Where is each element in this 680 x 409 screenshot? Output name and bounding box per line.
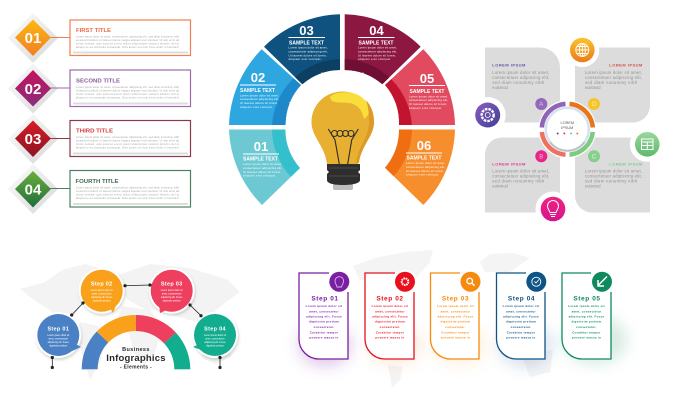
segment 05: aliquam erat volutpat. — [409, 106, 442, 110]
card: step 03: consectetur. — [445, 325, 466, 329]
bubble: step 01: amet, consectetuer — [49, 338, 68, 340]
card: step 02: consectetur. — [380, 325, 400, 329]
card: step 05: consectetur. — [576, 325, 597, 329]
bubble: step 01 — [35, 312, 82, 360]
segment 05 — [385, 49, 455, 125]
card: top right — [575, 48, 650, 122]
segment 02: Ut laoreet dolore sit lorem, — [240, 101, 278, 105]
badge B: B — [539, 154, 543, 160]
segment 06: 06 — [417, 138, 431, 153]
card: bottom left: sed diam nonummy nibh — [492, 178, 545, 184]
segment 03: Lorem ipsum dolor sit amet, — [288, 46, 328, 50]
card: step 05: Lorem ipsum dolor sit — [568, 304, 605, 308]
badge C — [588, 150, 600, 162]
card: step 01: Lorem ipsum dolor sit — [306, 304, 342, 308]
segment 06 — [385, 130, 455, 205]
segment 05: Ut laoreet dolore sit lorem, — [409, 102, 447, 106]
item 03: aliquip ex ea commodo consequat. Duis autem vel eum iriure dolor in hendrerit — [76, 146, 179, 150]
segment 04: aliquam erat volutpat. — [358, 57, 391, 61]
item 02: SECOND TITLE — [76, 78, 120, 84]
item 04: 04 — [25, 182, 42, 198]
item 01: minim veniam, quis nostrud exerci tation ullamcorper suscipit lobortis nisl ut — [76, 42, 179, 46]
segment 05: consectetuer adipiscing elit, — [409, 98, 448, 102]
item 01: euismod tincidunt ut laoreet dolore magna aliquam erat volutpat. Ut wisi enim ad — [76, 39, 180, 42]
item 04: Lorem ipsum dolor sit amet, consectetuer adipiscing elit, sed diam nonummy nibh — [76, 186, 180, 190]
item 01 — [8, 13, 190, 63]
bubble: step 01: Step 01 — [47, 326, 69, 332]
card: step 02: posuere massa in — [375, 336, 405, 340]
segment 06: Lorem ipsum dolor sit amet, — [406, 161, 445, 165]
badge C: C — [592, 154, 597, 160]
segment 01 — [229, 130, 300, 205]
badge B — [535, 150, 547, 162]
world map background — [20, 264, 240, 380]
card: bottom right: consectetuer adipiscing elit, — [585, 174, 642, 178]
card: bottom right: sed diam nonummy nibh — [585, 178, 638, 184]
item 04: minim veniam, quis nostrud exerci tation ullamcorper suscipit lobortis nisl ut — [76, 194, 179, 196]
panel: light bulb wheel — [229, 14, 455, 205]
card: top right: sed diam nonummy nibh — [585, 80, 638, 85]
segment 01: Lorem ipsum dolor sit amet, — [243, 162, 282, 166]
segment 02: consectetuer adipiscing elit, — [240, 97, 279, 101]
card: bottom left — [485, 138, 560, 212]
segment 01: aliquam erat volutpat. — [243, 174, 276, 178]
item 03 — [8, 114, 190, 164]
item 02: euismod tincidunt ut laoreet dolore magna aliquam erat volutpat. Ut wisi enim ad — [76, 90, 180, 92]
central ring: LOREM — [561, 121, 574, 125]
card: top left: Lorem ipsum dolor sit amet, — [492, 70, 549, 75]
card: step 03: Curabitur tempor — [441, 330, 470, 334]
card: top right: LOREM IPSUM — [609, 62, 643, 68]
segment 04: Ut laoreet dolore sit lorem, — [358, 54, 396, 58]
item 02: 02 — [25, 81, 41, 98]
item 03: 03 — [25, 131, 41, 148]
arc caption: - Elements - — [120, 364, 152, 370]
card: top right: euismod — [585, 85, 601, 90]
item 04: FOURTH TITLE — [76, 179, 119, 185]
card: step 01: adipiscing elit. Fusce — [306, 314, 342, 318]
item 01: FIRST TITLE — [76, 28, 111, 34]
arc caption: Business — [122, 347, 150, 353]
segment 06: consectetuer adipiscing elit, — [406, 165, 445, 169]
segment 01: consectetuer adipiscing elit, — [243, 166, 282, 170]
card: step 01: consectetur. — [314, 325, 334, 329]
segment 06: aliquam erat volutpat. — [406, 172, 439, 176]
segment 02: SAMPLE TEXT — [240, 88, 276, 94]
card: bottom left: euismod — [492, 184, 508, 188]
item 04: aliquip ex ea commodo consequat. Duis autem vel eum iriure dolor in hendrerit — [76, 197, 179, 200]
card: bottom left: consectetuer adipiscing elit, — [492, 174, 549, 178]
icon: table — [630, 127, 665, 162]
segment 05: Lorem ipsum dolor sit amet, — [409, 94, 448, 98]
bubble: step 04 — [192, 312, 239, 360]
world map background — [353, 250, 553, 388]
card: step 03: Lorem ipsum dolor sit — [437, 304, 474, 308]
card: step 05: dignissim pretium — [572, 320, 602, 324]
card: step 04: posuere massa in — [506, 336, 536, 340]
item 03: euismod tincidunt ut laoreet dolore magna aliquam erat volutpat. Ut wisi enim ad — [76, 140, 180, 142]
bubble: step 03: adipiscing elit. Fusce — [161, 296, 183, 299]
item 03: THIRD TITLE — [76, 128, 113, 134]
bubble: step 04: Lorem ipsum dolor sit — [204, 334, 226, 337]
segment 03: Ut laoreet dolore sit lorem, — [288, 54, 327, 58]
bubble: step 02: amet, consectetuer — [92, 292, 112, 296]
badge A — [535, 98, 547, 110]
card: step 03: adipiscing elit. Fusce — [438, 314, 474, 318]
item 01: 01 — [25, 30, 41, 47]
badge A: A — [539, 102, 543, 108]
card: bottom right: Lorem ipsum dolor sit amet, — [585, 168, 642, 174]
card: step 04: adipiscing elit. Fusce — [503, 314, 539, 318]
card: top left — [485, 48, 560, 122]
segment 02: aliquam erat volutpat. — [240, 105, 273, 109]
item 02 — [8, 64, 190, 114]
bubble: step 02: Lorem ipsum dolor sit — [91, 289, 113, 292]
icon: gear — [470, 97, 506, 133]
card: step 05: Step 05 — [573, 296, 601, 302]
bubble: step 01: adipiscing elit. Fusce — [48, 341, 70, 344]
segment 06: SAMPLE TEXT — [406, 156, 442, 162]
card: step 03: Step 03 — [442, 296, 469, 302]
segment 01: Ut laoreet dolore sit lorem, — [243, 170, 281, 174]
card: step 03 — [430, 270, 482, 359]
segment 04 — [344, 14, 421, 84]
segment 04: Lorem ipsum dolor sit amet, — [358, 46, 397, 50]
bubble: step 03: dignissim pretium — [163, 300, 181, 302]
card: step 04: dignissim pretium — [506, 320, 536, 324]
central ring: IPSUM — [561, 126, 573, 130]
card: step 02: Lorem ipsum dolor sit — [372, 304, 408, 308]
card: bottom left: LOREM IPSUM — [492, 162, 526, 166]
bubble: step 03: Lorem ipsum dolor sit — [161, 289, 183, 292]
item 02: aliquip ex ea commodo consequat. Duis autem vel eum iriure dolor in hendrerit — [76, 96, 179, 100]
segment 01: 01 — [254, 139, 268, 154]
segment 02: 02 — [251, 70, 265, 85]
arc caption — [106, 347, 166, 370]
semicircle arc chart — [90, 323, 182, 369]
bubble: step 04: dignissim pretium — [206, 344, 224, 348]
panel: four-quadrant lorem ipsum diagram — [470, 33, 665, 226]
card: step 02: adipiscing elit. Fusce — [372, 314, 408, 318]
card: top left: euismod — [492, 85, 508, 90]
bubble: step 01: dignissim pretium — [49, 344, 67, 348]
bubble: step 04: adipiscing elit. Fusce — [204, 341, 226, 344]
card: top right: consectetuer adipiscing elit, — [585, 75, 642, 80]
bubble: step 04: Step 04 — [204, 326, 226, 332]
card: top left: sed diam nonummy nibh — [492, 80, 545, 85]
item 02: minim veniam, quis nostrud exerci tation ullamcorper suscipit lobortis nisl ut — [76, 93, 179, 96]
bubble: step 02: adipiscing elit. Fusce — [91, 296, 113, 299]
card: step 02 — [365, 270, 417, 359]
coloured glows — [298, 316, 627, 367]
bubble: step 03: Step 03 — [161, 282, 183, 288]
segment 03: 03 — [299, 23, 314, 38]
bubble: step 01: Lorem ipsum dolor sit — [47, 334, 70, 337]
card: step 01 — [299, 270, 351, 359]
segment 02 — [229, 49, 301, 125]
card: step 01: dignissim pretium — [309, 320, 339, 324]
central ring — [538, 100, 596, 158]
card: step 05: Curabitur tempor — [572, 330, 601, 334]
card: top right: Lorem ipsum dolor sit amet, — [585, 70, 642, 75]
card: step 02: dignissim pretium — [375, 320, 405, 324]
card: step 04: Curabitur tempor — [507, 330, 536, 334]
item 03: minim veniam, quis nostrud exerci tation ullamcorper suscipit lobortis nisl ut — [76, 143, 179, 146]
panel: numbered title list — [8, 13, 190, 214]
segment 02: Lorem ipsum dolor sit amet, — [240, 94, 279, 98]
bubble: step 02: Step 02 — [91, 282, 113, 288]
segment 03: aliquam erat volutpat. — [288, 57, 322, 61]
bubble: step 02 — [79, 268, 126, 316]
card: step 03: posuere massa in — [441, 336, 470, 340]
panel: business infographics steps — [20, 264, 240, 380]
segment 03: consectetuer adipiscing elit, — [288, 50, 328, 54]
card: step 04: consectetur. — [511, 325, 531, 329]
item 01: aliquip ex ea commodo consequat. Duis autem vel eum iriure dolor in hendrerit — [76, 46, 179, 49]
segment 03 — [264, 14, 340, 84]
bubble: step 04: amet, consectetuer — [205, 338, 225, 340]
card: step 03: amet, consectetur — [441, 309, 471, 313]
card: step 02: amet, consectetur — [375, 309, 405, 313]
card: step 05: adipiscing elit. Fusce — [569, 314, 605, 318]
card: step 04: amet, consectetur — [506, 309, 536, 313]
segment 06: Ut laoreet dolore sit lorem, — [406, 169, 444, 173]
segment 05: 05 — [420, 71, 434, 86]
badge D — [588, 98, 600, 110]
card: step 01: Curabitur tempor — [310, 330, 339, 334]
segment 03: SAMPLE TEXT — [289, 40, 325, 46]
bubble: step 02: dignissim pretium — [93, 300, 111, 302]
item 02: Lorem ipsum dolor sit amet, consectetuer adipiscing elit, sed diam nonummy nibh — [76, 86, 180, 89]
segment 05: SAMPLE TEXT — [410, 89, 445, 95]
panel: five step cards — [298, 250, 627, 388]
card: step 04: Step 04 — [508, 296, 535, 302]
card: step 01: Step 01 — [311, 296, 339, 302]
card: bottom right — [575, 138, 650, 212]
item 04: euismod tincidunt ut laoreet dolore magna aliquam erat volutpat. Ut wisi enim ad — [76, 190, 180, 193]
card: top left: LOREM IPSUM — [492, 62, 526, 68]
card: bottom right: euismod — [585, 184, 601, 188]
card: step 04: Lorem ipsum dolor sit — [503, 304, 539, 308]
bubble: step 03: amet, consectetuer — [162, 292, 182, 296]
card: bottom left: Lorem ipsum dolor sit amet, — [492, 168, 549, 174]
card: step 05 — [562, 270, 614, 359]
card: bottom right: LOREM IPSUM — [609, 162, 643, 166]
segment 04: SAMPLE TEXT — [358, 40, 394, 46]
icon: bulb — [536, 192, 570, 226]
card: step 05: posuere massa in — [572, 336, 601, 340]
badge D: D — [592, 102, 597, 108]
card: step 03: dignissim pretium — [440, 320, 471, 324]
item 03: Lorem ipsum dolor sit amet, consectetuer adipiscing elit, sed diam nonummy nibh — [76, 136, 180, 139]
item 04 — [8, 164, 190, 214]
arc caption: Infographics — [106, 353, 166, 364]
card: step 05: amet, consectetur — [572, 309, 602, 313]
card: step 02: Step 02 — [376, 296, 404, 302]
card: step 04 — [496, 270, 548, 359]
card: step 01: posuere massa in — [309, 336, 339, 340]
segment 04: consectetuer adipiscing elit, — [358, 50, 397, 54]
segment 04: 04 — [369, 23, 384, 38]
bubble: step 03 — [149, 268, 196, 316]
segment 01: SAMPLE TEXT — [243, 157, 279, 163]
item 01: Lorem ipsum dolor sit amet, consectetuer adipiscing elit, sed diam nonummy nibh — [76, 36, 180, 38]
connectors — [51, 284, 221, 369]
card: top left: consectetuer adipiscing elit, — [492, 75, 549, 80]
card: step 02: Curabitur tempor — [376, 330, 405, 334]
card: step 01: amet, consectetur — [309, 309, 339, 313]
icon: light bulb — [312, 92, 374, 190]
icon: globe — [565, 33, 599, 67]
